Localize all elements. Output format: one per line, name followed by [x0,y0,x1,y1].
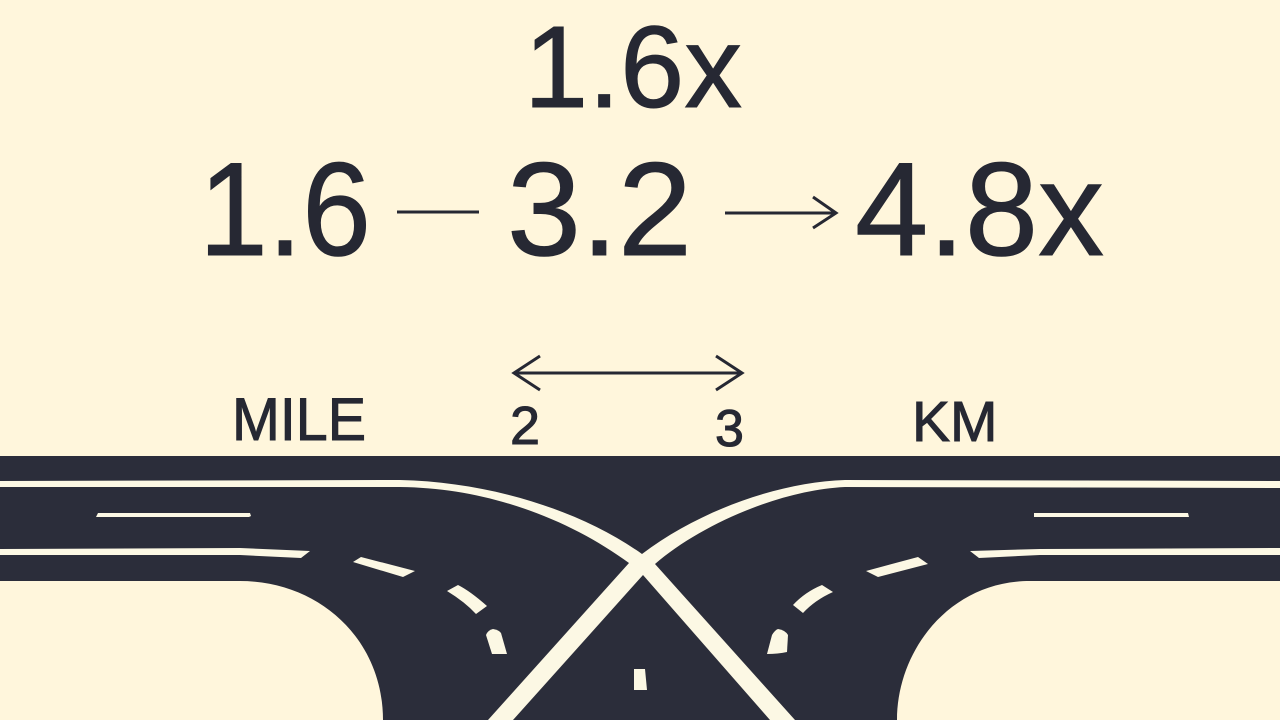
heading: 1.6x multiplier: 1.6x [524,2,742,132]
label: 3: 3 [715,400,744,458]
right dashed lane markings [767,557,928,654]
double-headed arrow between 2 and 3 [514,356,742,390]
left dashed lane markings [353,557,507,654]
label: MILE: MILE [232,386,366,453]
arrow from 3.2 to 4.8x [725,197,836,228]
value: 1.6: 1.6 [199,136,371,284]
left short lane line [96,513,251,517]
value: 3.2: 3.2 [507,136,692,284]
right road edge line curving into the junction [488,480,1280,720]
right short lane line [1034,513,1189,517]
left road edge line curving into the junction [0,480,795,720]
label: KM: KM [912,390,998,454]
road illustration [0,456,1280,720]
left lower lane line [0,548,310,558]
label: 2: 2 [510,396,540,456]
centre dash [634,669,647,690]
road surface [0,456,1280,720]
value: 4.8x: 4.8x [855,136,1104,284]
right lower lane line [970,548,1280,558]
connector line between 1.6 and 3.2 [397,210,479,214]
